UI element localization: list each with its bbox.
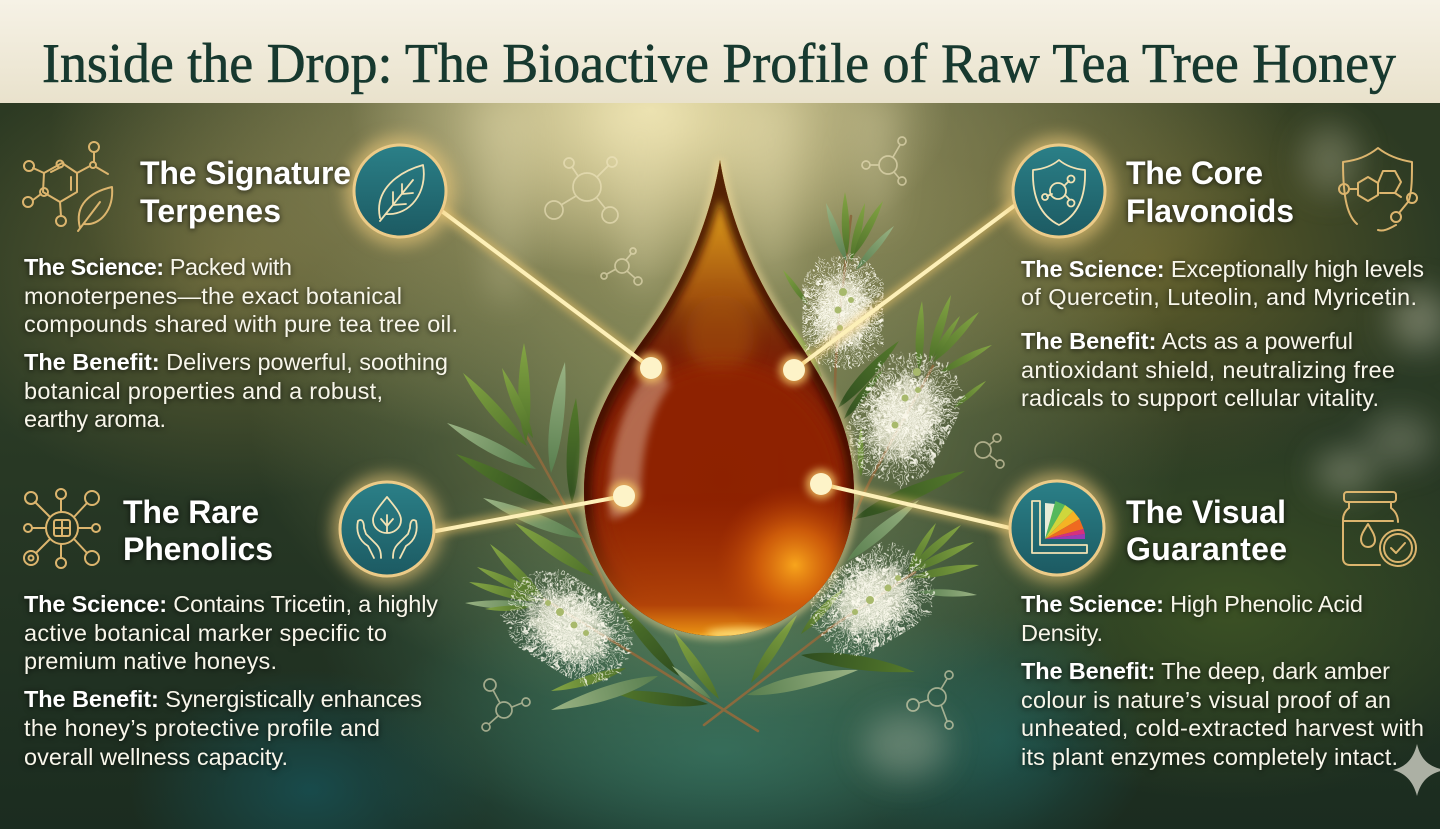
icon: jar with seal [1343,492,1416,566]
text block [1021,591,1424,770]
text block: botanical properties and a robust, [24,378,383,404]
honey drop [570,150,875,650]
panel: The Core Flavonoids [1004,136,1424,411]
heading: The Core [1126,155,1263,191]
icon: molecule with leaf [23,142,112,231]
text block [24,254,458,432]
text block: antioxidant shield, neutralizing free [1021,357,1395,383]
icon: shield with hexagons [1339,148,1417,231]
text block: The Benefit: Acts as a powerful [1021,328,1353,354]
text block [24,591,438,770]
text block: the honey’s protective profile and [24,715,380,741]
text block: The Benefit: The deep, dark amber [1021,658,1390,684]
heading [123,494,273,567]
text block: The Science: Exceptionally high levels [1021,256,1424,282]
text block: radicals to support cellular vitality. [1021,385,1379,411]
text block [1021,256,1424,411]
connector lines and anchor dots [436,206,1014,531]
icon disc: shield molecule [1004,136,1114,246]
text block: colour is nature’s visual proof of an [1021,687,1391,713]
icon disc: colour fan and ruler [1002,473,1112,583]
text block: monoterpenes—the exact botanical [24,283,402,309]
drop body [584,160,854,636]
text block: premium native honeys. [24,648,277,674]
drop glow [584,160,854,636]
heading: The Visual [1126,494,1286,530]
decorative molecules [482,137,1004,731]
panel: The Rare Phenolics [24,474,442,770]
text block: Density. [1021,620,1103,646]
glowing connector lines [436,206,1014,531]
icon: sparkle watermark [1393,744,1440,796]
text block: compounds shared with pure tea tree oil. [24,311,458,337]
icon: phenolic network [24,489,100,568]
heading [1126,155,1294,229]
text block: its plant enzymes completely intact. [1021,744,1398,770]
text block: overall wellness capacity. [24,744,288,770]
icon disc: leaf [345,136,455,246]
blossom buds [545,288,921,636]
title: Inside the Drop: The Bioactive Profile of Raw Tea Tree Honey [42,33,1396,95]
text block: earthy aroma. [24,406,166,432]
text block: active botanical marker specific to [24,620,387,646]
text block: The Science: Contains Tricetin, a highly [24,591,438,617]
icon disc: hands holding leaf drop [332,474,442,584]
text block: of Quercetin, Luteolin, and Myricetin. [1021,284,1417,310]
background: light rays and bokeh [470,103,1440,777]
heading: The Rare [123,494,259,530]
header band [0,0,1440,103]
blossoms [517,579,621,673]
text block: unheated, cold-extracted harvest with [1021,715,1424,741]
stems [526,216,933,731]
panel: The Visual Guarantee [1002,473,1424,770]
tea tree branches and blossoms [444,192,993,731]
text block: The Science: Packed with [24,254,292,280]
heading [1126,494,1287,567]
heading: The Signature [140,155,351,191]
text block: The Benefit: Synergistically enhances [24,686,422,712]
text block: The Science: High Phenolic Acid [1021,591,1363,617]
heading [140,155,351,229]
heading: Flavonoids [1126,193,1294,229]
text block: The Benefit: Delivers powerful, soothing [24,349,448,375]
panel: The Signature Terpenes [23,136,458,432]
heading: Guarantee [1126,531,1287,567]
heading: Phenolics [123,531,273,567]
heading: Terpenes [140,193,281,229]
leaves [517,343,531,442]
